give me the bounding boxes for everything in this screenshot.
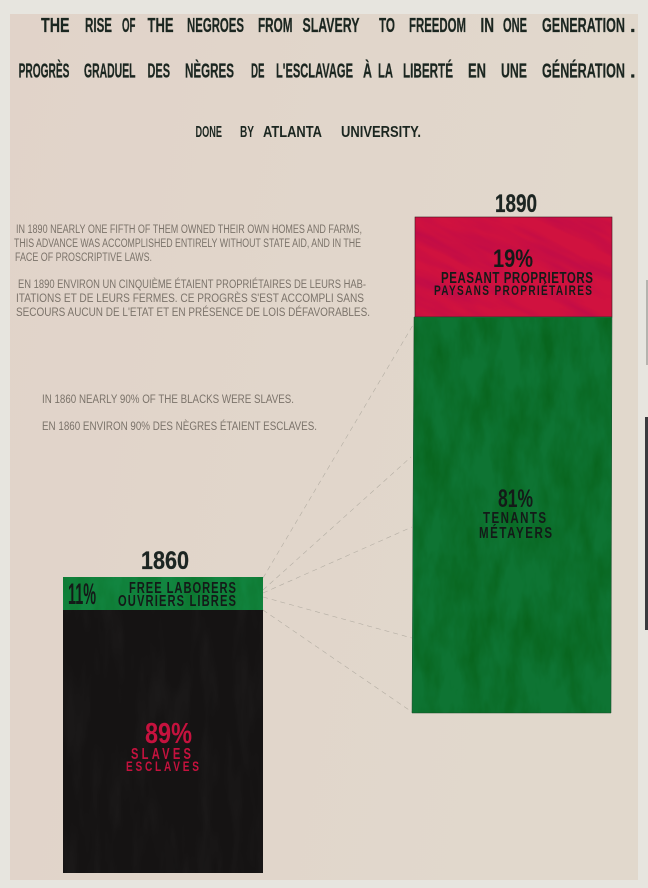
title: French: NÈGRES	[185, 60, 234, 82]
title: English: ONE	[503, 15, 527, 37]
text block: 1860 French: EN 1860 ENVIRON 90% DES NÈGRES ÉTAIENT ESCLAVES.	[42, 420, 317, 433]
title: English: TO	[379, 15, 395, 37]
title: French: EN	[468, 60, 486, 82]
title: English	[41, 15, 636, 37]
title: English: SLAVERY	[302, 15, 360, 37]
text block: 1890 French: EN 1890 ENVIRON UN CINQUIÈME ÉTAIENT PROPRIÉTAIRES DE LEURS HAB-	[18, 278, 366, 291]
title: French: DE	[251, 60, 264, 82]
segment: tenants 81%: MÉTAYERS	[479, 523, 552, 541]
title: English: NEGROES	[187, 15, 244, 37]
title: French: LA	[378, 60, 393, 82]
text block: 1890 French	[16, 278, 370, 319]
year label: 1860: 1860	[141, 547, 189, 575]
segment: slaves 89%: SLAVES	[131, 745, 191, 762]
segment: slaves 89%	[63, 610, 263, 873]
title: French: .	[630, 60, 636, 82]
segment: slaves 89%: 89%	[145, 718, 192, 750]
title: English: RISE	[85, 15, 112, 37]
title: English: THE	[148, 15, 174, 37]
text block: 1890 English	[14, 224, 362, 264]
credit line: ATLANTA	[263, 124, 322, 141]
title: French: PROGRÈS	[19, 60, 69, 82]
segment: free laborers 11%: 11%	[68, 578, 96, 611]
title: English: IN	[480, 15, 494, 37]
text block: 1890 English: IN 1890 NEARLY ONE FIFTH OF THEM OWNED THEIR OWN HOMES AND FARMS,	[16, 224, 362, 236]
credit line	[196, 124, 421, 141]
dashed connector lines	[263, 325, 413, 712]
segment: peasant proprietors 19%: PEASANT PROPRIETORS	[441, 268, 593, 286]
credit line: DONE	[196, 124, 222, 141]
title: French: GRADUEL	[84, 60, 136, 82]
neighbouring sheet at right edge	[645, 280, 648, 630]
text block: 1860 English: IN 1860 NEARLY 90% OF THE BLACKS WERE SLAVES.	[42, 394, 294, 406]
segment: slaves 89%: ESCLAVES	[126, 758, 199, 774]
title: English: OF	[122, 15, 136, 37]
title: English: FROM	[258, 15, 292, 37]
year label: 1890: 1890	[495, 190, 537, 218]
title: French: LIBERTÉ	[403, 60, 453, 82]
bar: 1860	[63, 577, 263, 873]
text block: 1890 French: ITATIONS ET DE LEURS FERMES. CE PROGRÈS S'EST ACCOMPLI SANS	[16, 292, 364, 305]
segment: peasant proprietors 19%: PAYSANS PROPRIÉTAIRES	[434, 281, 592, 298]
text block: 1890 French: SECOURS AUCUN DE L'ETAT ET EN PRÉSENCE DE LOIS DÉFAVORABLES.	[16, 306, 370, 319]
title: English: FREEDOM	[409, 15, 466, 37]
title: French	[19, 60, 636, 82]
title: English: .	[630, 15, 636, 37]
segment: tenants 81%: 81%	[498, 485, 533, 513]
text block: 1890 English: THIS ADVANCE WAS ACCOMPLISHED ENTIRELY WITHOUT STATE AID, AND IN THE	[14, 238, 361, 250]
segment: tenants 81%	[412, 317, 612, 713]
segment: tenants 81%: TENANTS	[483, 508, 546, 526]
segment: peasant proprietors 19%	[414, 216, 612, 318]
credit line: BY	[240, 124, 254, 141]
title: French: DES	[148, 60, 170, 82]
segment: free laborers 11%: FREE LABORERS	[129, 579, 236, 596]
credit line: UNIVERSITY.	[341, 124, 421, 141]
title: English: THE	[41, 15, 70, 37]
title: French: L'ESCLAVAGE	[276, 60, 353, 82]
segment: free laborers 11%: OUVRIERS LIBRES	[118, 592, 236, 609]
text block: 1890 English: FACE OF PROSCRIPTIVE LAWS.	[15, 252, 152, 264]
bar: 1890	[412, 216, 612, 714]
title: French: UNE	[501, 60, 527, 82]
segment: free laborers 11%	[63, 577, 263, 611]
title: French: À	[363, 60, 372, 82]
segment: peasant proprietors 19%: 19%	[493, 244, 533, 273]
